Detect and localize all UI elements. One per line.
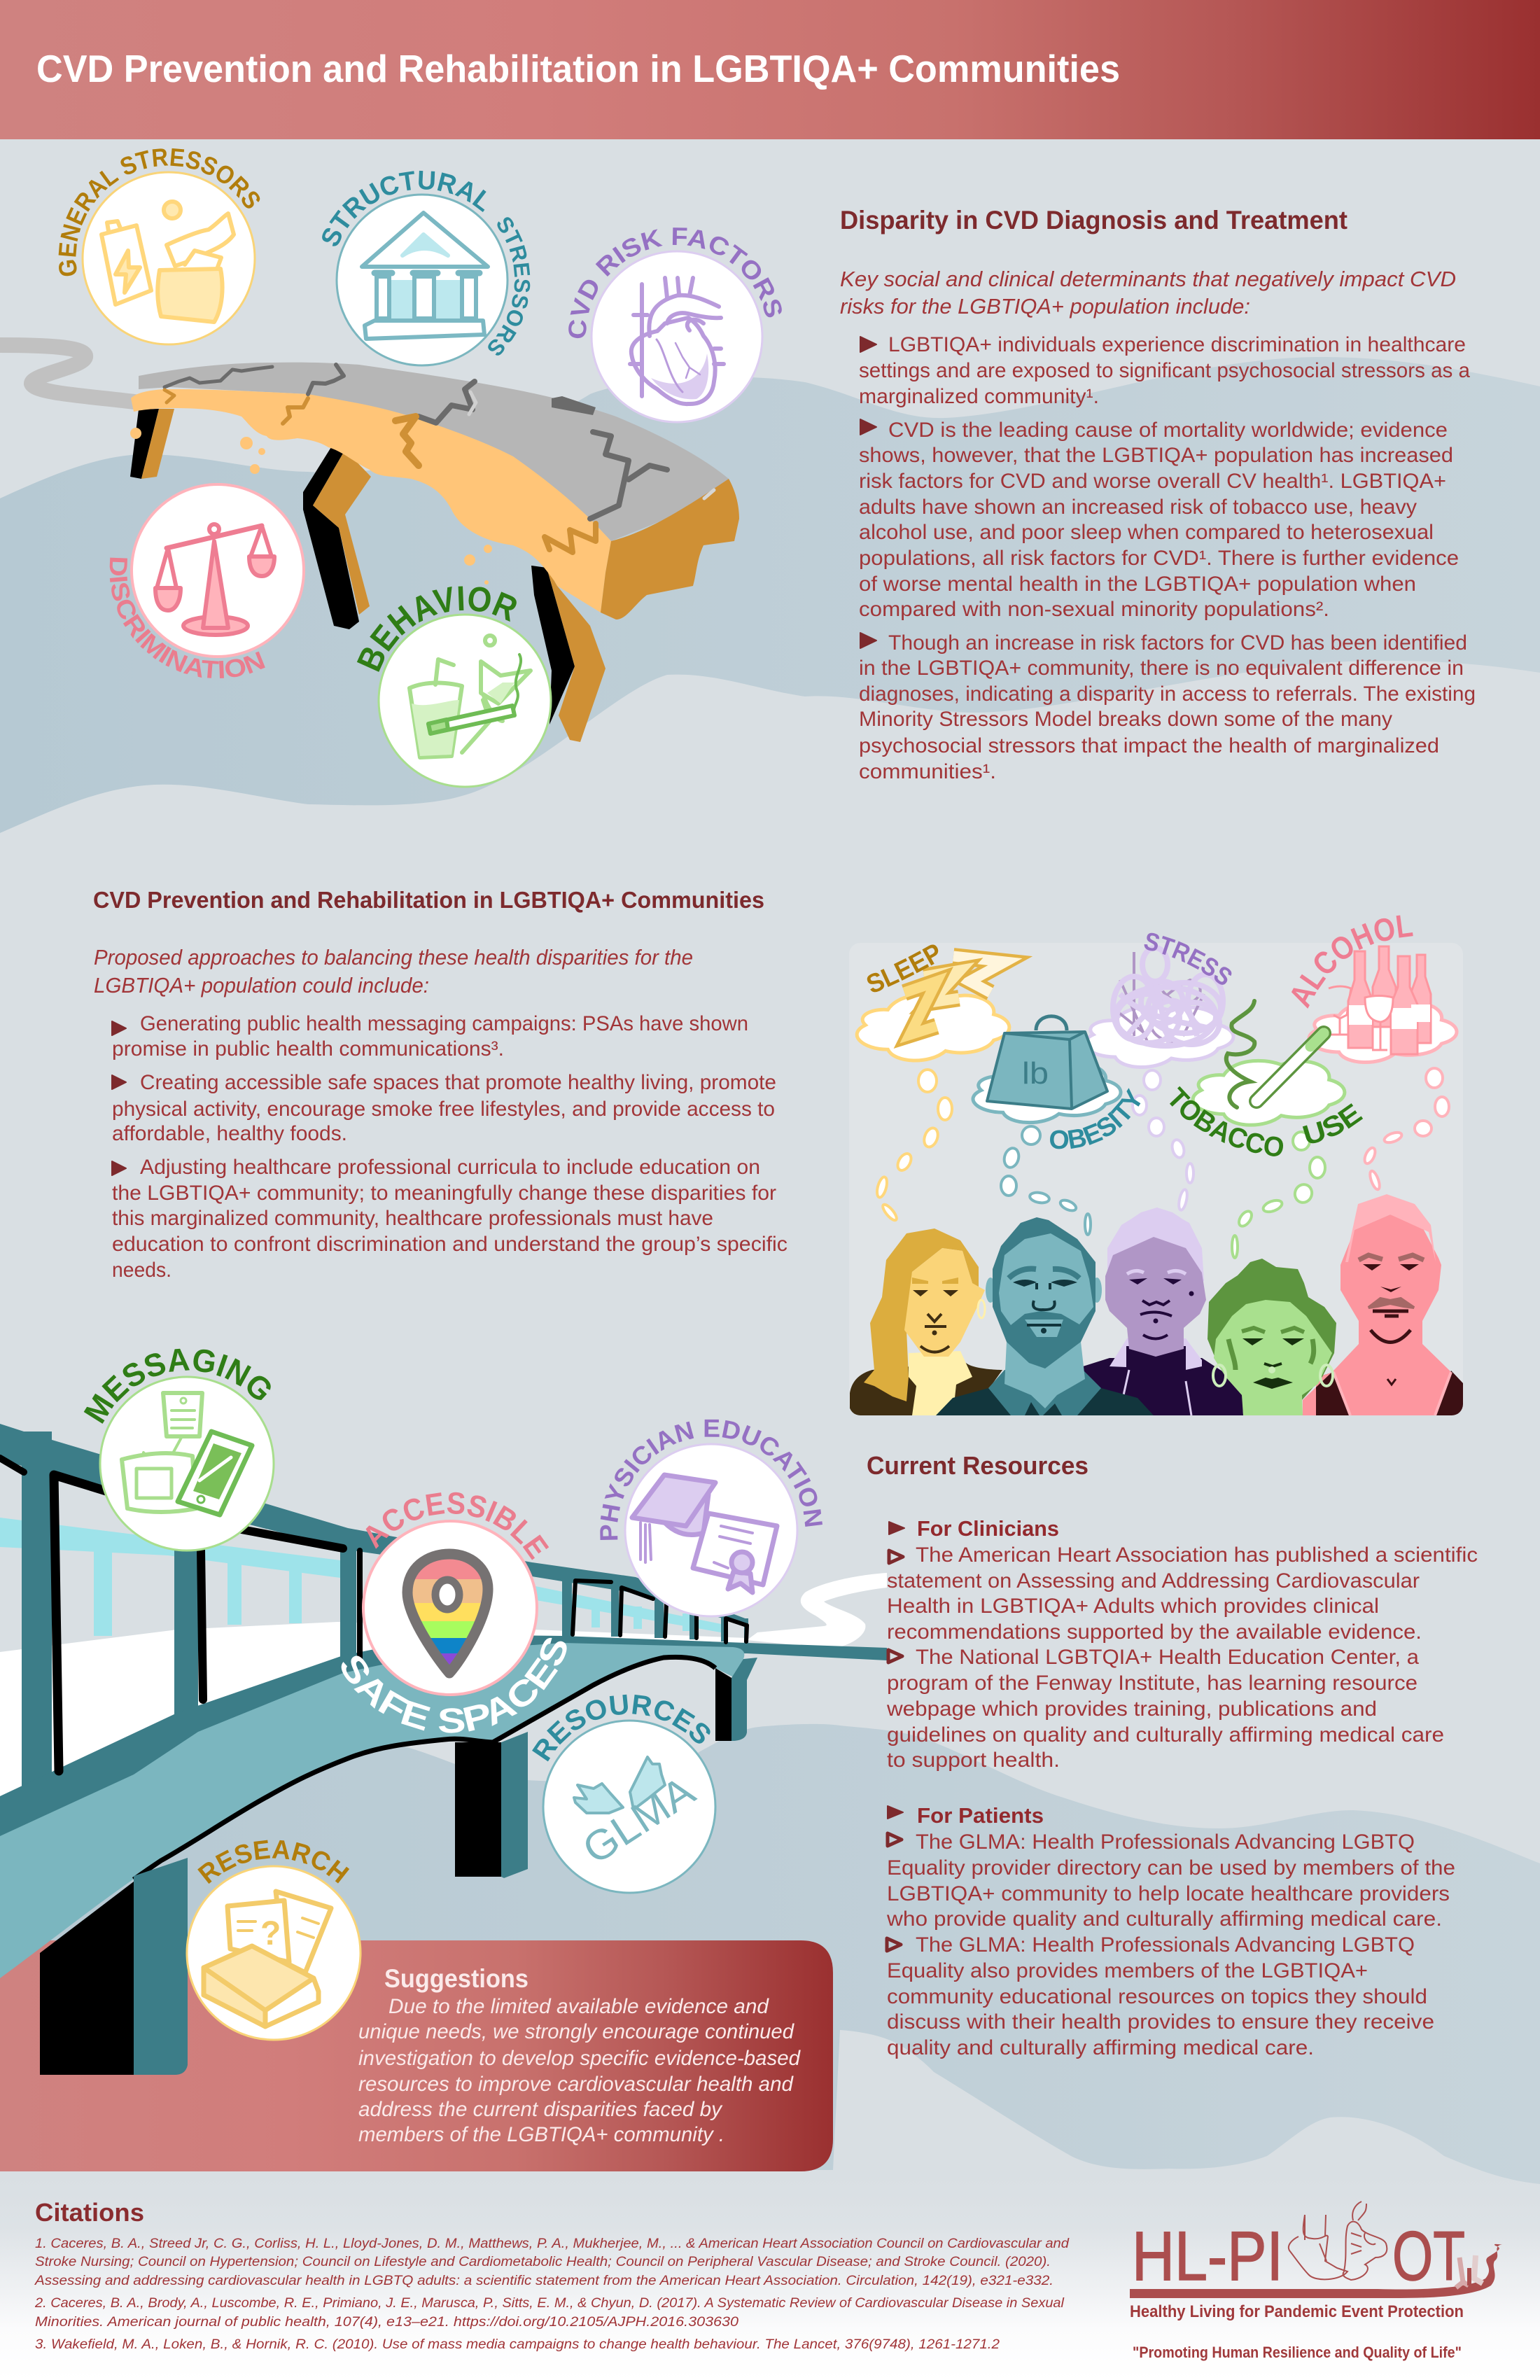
section: suggestions text [358, 1964, 801, 2146]
panel: physician education [594, 1414, 829, 1616]
panel: accessible safe spaces [342, 1492, 567, 1733]
label: stress: STRESS [1144, 932, 1232, 985]
bullet 3: diagnoses, indicating a disparity in access to referrals. The existing [859, 682, 1476, 706]
citation 1: Stroke Nursing; Council on Hypertension; Council on Lifestyle and Cardiometabolic Health; Council on Peripheral Vascular Disease; and Stroke Council. (2020). [35, 2254, 1051, 2269]
section: suggestions text: members of the LGBTIQA+ community . [358, 2123, 724, 2146]
label: resources: RESOURCES [532, 1694, 710, 1761]
panel: general stressors [59, 148, 260, 346]
citation 2: Minorities. American journal of public health, 107(4), e13–e21. https://doi.org/10.2105/AJPH.2016.303630 [35, 2314, 738, 2330]
bullet 3: needs. [112, 1259, 172, 1282]
railing black shadows [0, 1458, 747, 1771]
logo: hl-pivot: OT [1392, 2217, 1465, 2295]
bullet 3: Though an increase in risk factors for CVD has been identified [888, 631, 1467, 654]
label: obesity: OBESITY [1050, 1088, 1141, 1149]
icon: anatomical heart [630, 278, 724, 404]
section: prevention and rehabilitation [93, 887, 788, 1282]
icon: weight: lb [1022, 1056, 1049, 1091]
cloud: sleep [857, 938, 1009, 1060]
intro text [94, 945, 693, 997]
bullet 3: education to confront discrimination and understand the group’s specific [112, 1233, 788, 1256]
tagline: Healthy Living for Pandemic Event Protection [1130, 2302, 1464, 2321]
thought bubbles: tobacco [1232, 1132, 1325, 1258]
background wave: upper section [0, 357, 1540, 833]
cloud: stress [1085, 926, 1238, 1068]
bullet 3: psychosocial stressors that impact the health of marginalized [859, 734, 1439, 757]
intro text: risks for the LGBTIQA+ population include: [840, 294, 1250, 318]
front pillar [40, 1858, 188, 2075]
center pillar [455, 1732, 528, 1878]
section: citations [34, 2198, 1070, 2352]
heading: Citations [35, 2198, 144, 2227]
citation 2: 2. Caceres, B. A., Brody, A., Luscombe, R. E., Primiano, J. E., Marusca, P., Sitts, E. M., & Chyun, D. (2017). A Systematic Review of Cardiovascular Disease in Sexual [34, 2295, 1065, 2311]
logo: hl-pivot: HL-PI [1132, 2217, 1283, 2295]
bullet 2: physical activity, encourage smoke free lifestyles, and provide access to [112, 1098, 775, 1121]
heading: CVD Prevention and Rehabilitation in LGBTIQA+ Communities [93, 887, 764, 913]
label: cvd risk factors: CVD RISK FACTORS [568, 227, 782, 339]
icon: courthouse building [362, 213, 488, 339]
bullet 2: adults have shown an increased risk of tobacco use, heavy [859, 496, 1417, 519]
for patients: The GLMA: Health Professionals Advancing LGBTQ [916, 1830, 1415, 1854]
for clinicians: recommendations supported by the available evidence. [887, 1620, 1422, 1644]
section: suggestions text: address the current disparities faced by [358, 2098, 723, 2121]
for patients: quality and culturally affirming medical care. [887, 2036, 1314, 2059]
illustration: hopeful bridge [0, 1424, 887, 2075]
right pillar [715, 1658, 757, 1741]
thought bubbles: stress [1133, 1070, 1194, 1211]
panel: messaging [76, 1340, 281, 1550]
for clinicians [886, 1516, 1478, 1772]
for patients: The GLMA: Health Professionals Advancing LGBTQ [916, 1933, 1415, 1956]
icon: battery, money and bag [102, 202, 234, 322]
section: suggestions text: Due to the limited available evidence and [388, 1995, 769, 2018]
for patients: Equality provider directory can be used by members of the [887, 1856, 1455, 1879]
label: messaging: MESSAGING [84, 1348, 271, 1424]
icon: tv, document and phone [122, 1393, 252, 1515]
intro text [840, 267, 1456, 318]
for patients [886, 1803, 1455, 2059]
bullet 2 [859, 419, 1459, 621]
falling debris droplets [130, 428, 492, 584]
person: green portrait with curly hair [1208, 1259, 1336, 1415]
intro text: LGBTIQA+ population could include: [94, 973, 429, 997]
heading: Suggestions [384, 1964, 528, 1993]
icon: graduation cap and diploma [632, 1475, 777, 1592]
cloud: alcohol [1282, 906, 1457, 1063]
citation 1: 1. Caceres, B. A., Streed Jr, C. G., Corliss, H. L., Lloyd-Jones, D. M., Matthews, P. A., Mukherjee, M., ... & American Heart Association Council on Cardiovascular and [35, 2236, 1070, 2251]
bullet 3: Minority Stressors Model breaks down some of the many [859, 708, 1392, 731]
person: pink portrait [1303, 1194, 1464, 1415]
bullet 1: Generating public health messaging campaigns: PSAs have shown [140, 1012, 748, 1035]
citation 2 [34, 2295, 1065, 2330]
bullet 3 [112, 1156, 788, 1282]
section: suggestions text: resources to improve cardiovascular health and [358, 2073, 794, 2096]
citation 3: 3. Wakefield, M. A., Loken, B., & Hornik, R. C. (2010). Use of mass media campaigns to change health behaviour. The Lancet, 376(9748), 1261-1271.2 [35, 2337, 1000, 2352]
thought bubbles: obesity [1001, 1126, 1091, 1235]
label: discrimination: DISCRIMINATION [109, 557, 265, 678]
suggestions box background [0, 1940, 833, 2171]
for patients: who provide quality and culturally affirming medical care. [886, 1907, 1442, 1931]
label: stressors: STRESSORS [488, 217, 531, 356]
for patients: discuss with their health provides to ensure they receive [887, 2010, 1434, 2033]
icon: walking figures [1456, 2255, 1483, 2288]
road squiggle leading to crumbling bridge [0, 345, 140, 402]
icon: book and papers [204, 1891, 331, 2026]
bullet 2: of worse mental health in the LGBTIQA+ population when [859, 573, 1416, 596]
bullet 2: affordable, healthy foods. [112, 1122, 347, 1145]
far cyan railing [0, 1518, 721, 1636]
icon: scales of justice [155, 524, 274, 635]
bullet 1 [112, 1012, 748, 1060]
thought bubbles: sleep [875, 1070, 952, 1222]
icon: scribble [1113, 948, 1223, 1046]
for patients: community educational resources on topics they should [887, 1985, 1427, 2008]
bullet 2 [112, 1071, 776, 1145]
panel: cvd risk factors [562, 222, 789, 422]
person: purple portrait [1083, 1208, 1243, 1415]
near railing structure [0, 1424, 887, 1837]
bullet 1 [859, 333, 1470, 408]
panel: discrimination [104, 484, 304, 685]
for patients: Equality also provides members of the LGBTIQA+ [887, 1959, 1368, 1982]
cloud: obesity [973, 1016, 1149, 1155]
icon: drink, martini and cigarette [410, 636, 531, 757]
bullet 1: marginalized community¹. [859, 385, 1099, 408]
label: alcohol: ALCOHOL [1292, 916, 1413, 1009]
bullet 3: in the LGBTIQA+ community, there is no equivalent difference in [859, 657, 1464, 680]
for clinicians: statement on Assessing and Addressing Cardiovascular [887, 1569, 1420, 1592]
label: use: USE [1302, 1103, 1364, 1144]
logo: hl-pivot [1130, 2202, 1502, 2361]
citation 1 [34, 2236, 1070, 2288]
person: woman with blonde hair [850, 1228, 1002, 1415]
logo text: glma: GLMA [575, 1767, 703, 1873]
bullet 2: compared with non-sexual minority populations². [859, 598, 1329, 621]
label: tobacco: TOBACCO [1170, 1086, 1283, 1156]
leg right [531, 566, 606, 742]
panel: risk factors portraits [850, 916, 1463, 1415]
for clinicians: program of the Fenway Institute, has learning resource [887, 1672, 1418, 1695]
bullet 2: populations, all risk factors for CVD¹. There is further evidence [859, 547, 1459, 570]
leg middle [303, 447, 371, 629]
label: behavior: BEHAVIOR [357, 587, 517, 672]
bullet 3: the LGBTIQA+ community; to meaningfully change these disparities for [112, 1182, 776, 1205]
title: CVD Prevention and Rehabilitation in LGBTIQA+ Communities [36, 47, 1120, 90]
for clinicians: to support health. [887, 1749, 1060, 1772]
intro text: Proposed approaches to balancing these health disparities for the [94, 945, 693, 969]
leg left [130, 409, 174, 479]
header banner [0, 0, 1540, 139]
far road squiggle [747, 1573, 887, 1648]
thought bubbles: alcohol [1362, 1068, 1449, 1191]
icon: book and papers: ? [260, 1915, 281, 1952]
panel: research [187, 1835, 360, 2040]
label: physician education: PHYSICIAN EDUCATION [600, 1420, 822, 1540]
bullet 2: alcohol use, and poor sleep when compared to heterosexual [859, 521, 1434, 544]
icon: glma gloves [574, 1757, 665, 1813]
cloud: tobacco [1161, 1001, 1368, 1163]
icon: zzz [904, 956, 1005, 1035]
section: disparity in cvd diagnosis and treatment [840, 206, 1476, 783]
illustration: crumbling bridge [130, 363, 739, 742]
bullet 3: Adjusting healthcare professional curricula to include education on [140, 1156, 760, 1179]
bullet 1: promise in public health communications³. [112, 1037, 504, 1060]
label: structural: STRUCTURAL [322, 171, 486, 246]
for clinicians: Health in LGBTIQA+ Adults which provides clinical [887, 1595, 1379, 1618]
label: general stressors: GENERAL STRESSORS [59, 148, 260, 276]
white road behind railing [0, 1622, 747, 1802]
cracks [164, 365, 714, 552]
dark debris spot [552, 396, 596, 415]
label: sleep: SLEEP [867, 945, 938, 993]
deck black underside [134, 1657, 715, 1879]
icon: shoe and produce [1289, 2202, 1387, 2280]
bridge top surface [139, 363, 729, 541]
bridge edge orange [131, 389, 611, 612]
bullet 2: risk factors for CVD and worse overall CV health¹. LGBTIQA+ [859, 470, 1446, 493]
for patients: LGBTIQA+ community to help locate healthcare providers [887, 1882, 1450, 1905]
panel: resources [526, 1689, 718, 1893]
bullet 2: CVD is the leading cause of mortality worldwide; evidence [888, 419, 1448, 442]
label: safe spaces: SAFE SPACES [342, 1638, 567, 1733]
for clinicians: For Clinicians [917, 1516, 1059, 1541]
panel: behavior [349, 578, 551, 787]
for clinicians: guidelines on quality and culturally affirming medical care [887, 1723, 1444, 1746]
icon: bottles and glasses [1329, 946, 1431, 1054]
bullet 3 [859, 631, 1476, 783]
person: teal portrait with beard [936, 1217, 1154, 1415]
bullet 2: Creating accessible safe spaces that promote healthy living, promote [140, 1071, 776, 1094]
heading: Disparity in CVD Diagnosis and Treatment [840, 206, 1348, 234]
icon: rainbow map pin [399, 1547, 497, 1677]
bullet 3: this marginalized community, healthcare professionals must have [112, 1207, 713, 1230]
for clinicians: The National LGBTQIA+ Health Education Center, a [916, 1646, 1419, 1669]
icon: road swoosh [1130, 2244, 1502, 2298]
icon: weight [987, 1016, 1107, 1109]
heading: Current Resources [867, 1451, 1088, 1480]
background wave: lower section [0, 1724, 1540, 2184]
label: research: RESEARCH [197, 1840, 350, 1884]
bullet 1: LGBTIQA+ individuals experience discrimination in healthcare [888, 333, 1466, 356]
for clinicians: webpage which provides training, publications and [886, 1698, 1377, 1721]
for patients: For Patients [917, 1803, 1044, 1828]
bridge deck [0, 1643, 744, 1978]
national bullet above the bridge end [888, 1650, 902, 1662]
panel: structural stressors [322, 171, 531, 367]
motto: "Promoting Human Resilience and Quality of Life" [1133, 2344, 1462, 2361]
label: accessible: ACCESSIBLE [365, 1492, 549, 1560]
section: suggestions text: investigation to develop specific evidence-based [358, 2047, 801, 2070]
bullet 1: settings and are exposed to significant psychosocial stressors as a [859, 359, 1470, 382]
citation 1: Assessing and addressing cardiovascular health in LGBTQ adults: a scientific statement from the American Heart Association. Circulation, 142(19), e321-e332. [34, 2273, 1054, 2288]
bullet 2: shows, however, that the LGBTIQA+ population has increased [859, 444, 1453, 467]
section: suggestions text: unique needs, we strongly encourage continued [358, 2020, 794, 2043]
bullet 3: communities¹. [859, 760, 996, 783]
intro text: Key social and clinical determinants that negatively impact CVD [840, 267, 1456, 291]
icon: cigarette and smoke [1226, 1001, 1324, 1107]
for clinicians: The American Heart Association has published a scientific [916, 1544, 1478, 1567]
section: current resources [867, 1451, 1478, 2059]
broken end of bridge [601, 479, 739, 620]
